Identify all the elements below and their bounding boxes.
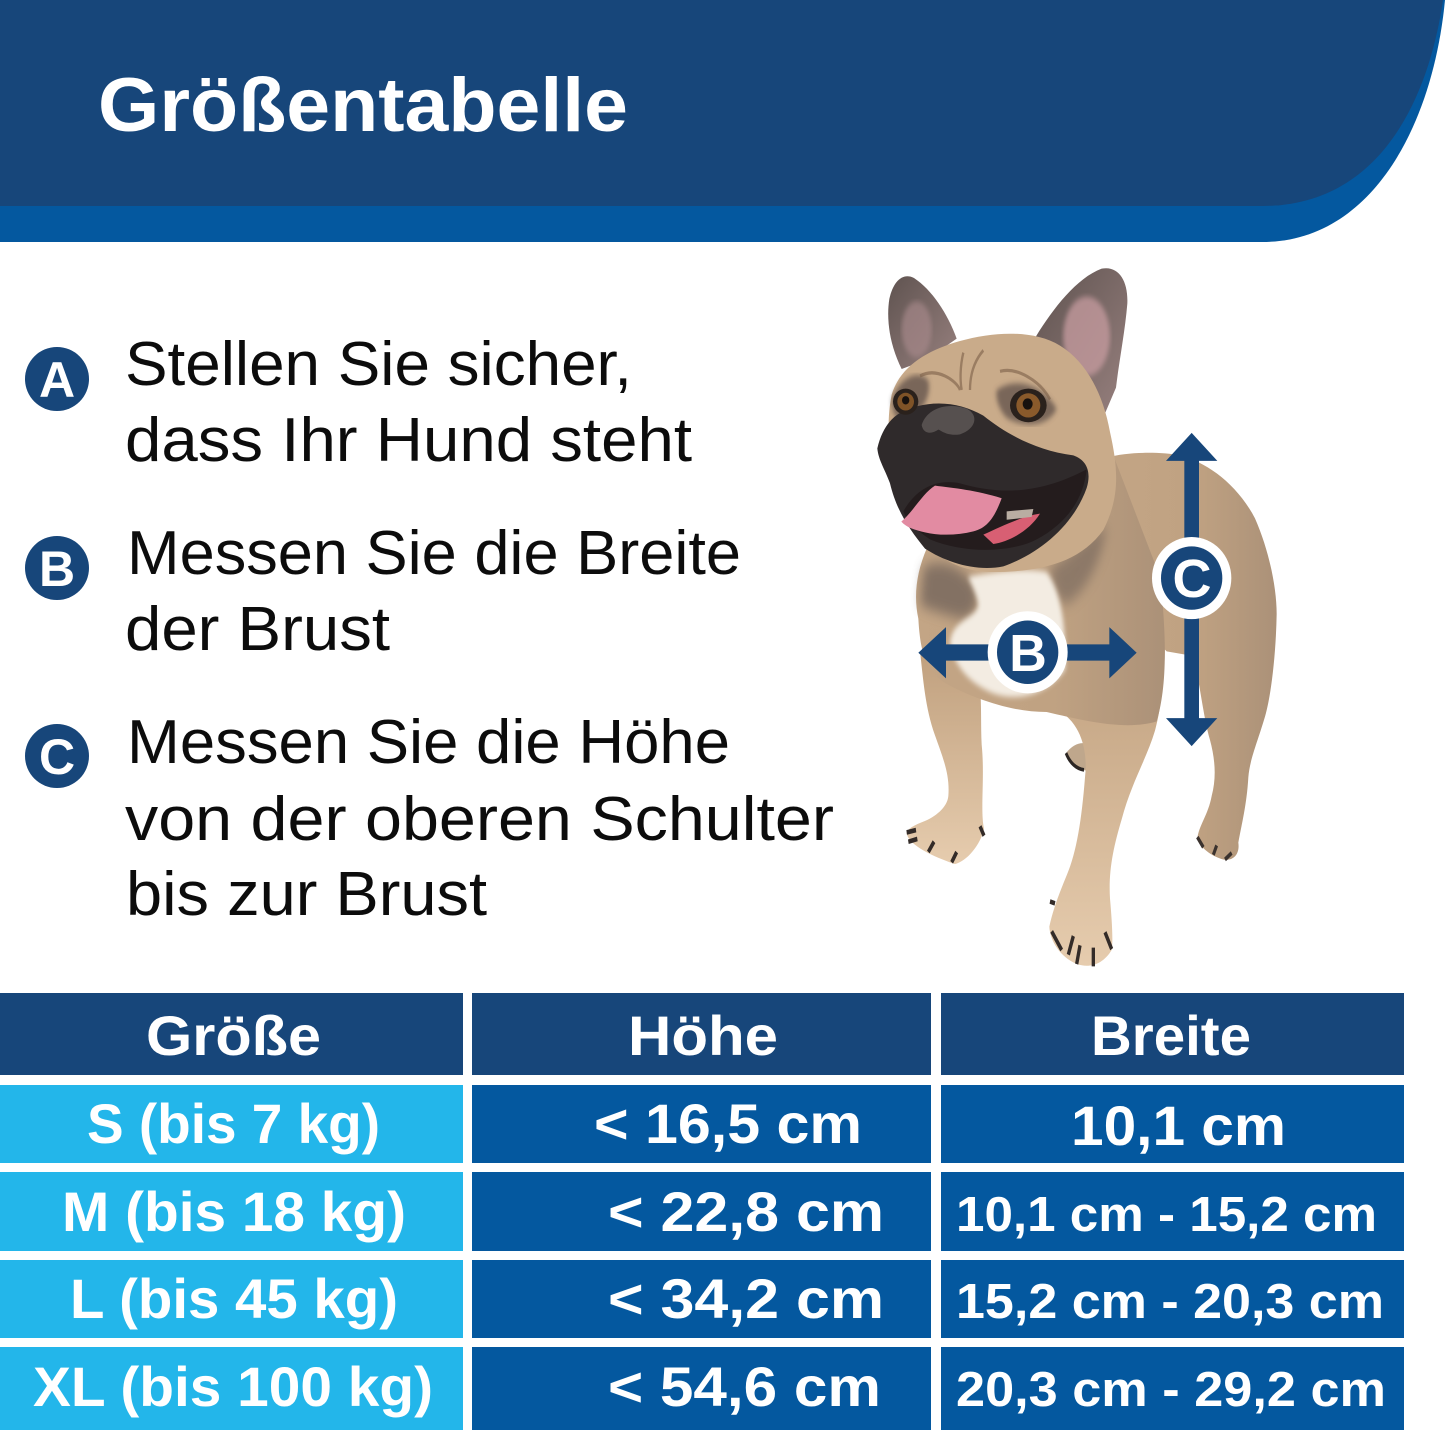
dog: hind leg and body <box>1093 453 1277 860</box>
step B text: der Brust <box>125 595 390 664</box>
row L: < 34,2 cm <box>608 1267 884 1330</box>
row L <box>0 1260 1404 1338</box>
row M: 10,1 cm - 15,2 cm <box>956 1188 1377 1242</box>
dog: right paw toes <box>1050 901 1112 966</box>
step C text: bis zur Brust <box>126 860 487 929</box>
arrow: width B <box>918 611 1137 693</box>
dog: lip <box>983 514 1040 544</box>
row XL: 20,3 cm - 29,2 cm <box>956 1363 1386 1417</box>
step C text: von der oberen Schulter <box>125 785 834 854</box>
dog: right ear <box>1036 268 1127 413</box>
row L: L (bis 45 kg) <box>70 1267 398 1330</box>
row S: < 16,5 cm <box>594 1092 862 1155</box>
step B text: Messen Sie die Breite <box>127 519 741 588</box>
step A <box>25 330 692 475</box>
step A text <box>125 330 692 475</box>
dog: nose <box>922 406 974 435</box>
header banner <box>0 0 1445 242</box>
row XL <box>0 1347 1404 1430</box>
dog: front right leg <box>1049 642 1165 966</box>
dog: left eye <box>893 389 918 415</box>
step C text <box>125 708 834 929</box>
row M <box>0 1172 1404 1251</box>
dog: forehead wrinkles <box>920 350 1050 399</box>
dog illustration with measurement arrows <box>877 268 1277 966</box>
dog: white chest patch <box>950 570 1065 697</box>
dog: dark muzzle <box>877 403 1089 568</box>
step B <box>25 519 741 664</box>
dog: chest <box>916 455 1165 725</box>
table header row <box>0 993 1404 1075</box>
dog: right eye <box>1010 389 1047 422</box>
table header row: Höhe <box>628 1004 778 1067</box>
row M: < 22,8 cm <box>608 1180 884 1243</box>
title: Größentabelle <box>98 63 628 148</box>
dog: eye shadows <box>892 375 1057 424</box>
dog: far back paw <box>1066 743 1090 771</box>
dog: hind paw toes <box>1197 837 1232 859</box>
dog: left paw toes <box>907 826 984 862</box>
row XL: XL (bis 100 kg) <box>33 1355 433 1418</box>
dog: tongue <box>901 486 1002 535</box>
step C text: Messen Sie die Höhe <box>127 708 730 777</box>
label C: C <box>1172 549 1212 609</box>
dog: teeth <box>1007 509 1033 520</box>
step C: C <box>39 729 75 785</box>
row L: 15,2 cm - 20,3 cm <box>956 1275 1384 1329</box>
table header row: Größe <box>146 1004 321 1067</box>
row S: S (bis 7 kg) <box>87 1092 380 1155</box>
step B text <box>125 519 741 664</box>
dog: head <box>889 334 1116 572</box>
step A text: dass Ihr Hund steht <box>125 406 692 475</box>
row S: 10,1 cm <box>1071 1094 1286 1157</box>
step A: A <box>39 352 75 408</box>
arrow: height C <box>1152 433 1231 746</box>
row XL: < 54,6 cm <box>608 1355 881 1418</box>
dog: left ear <box>888 276 957 369</box>
label B: B <box>1009 625 1047 683</box>
table header row: Breite <box>1091 1004 1251 1067</box>
step C <box>25 708 834 929</box>
dog: mouth <box>903 469 1087 550</box>
row M: M (bis 18 kg) <box>62 1180 406 1243</box>
dog: neck shadows <box>920 563 977 619</box>
dog: front left leg <box>907 651 984 864</box>
step A text: Stellen Sie sicher, <box>125 330 632 399</box>
step B: B <box>39 541 75 597</box>
row S <box>0 1085 1404 1163</box>
size table <box>0 993 1404 1430</box>
